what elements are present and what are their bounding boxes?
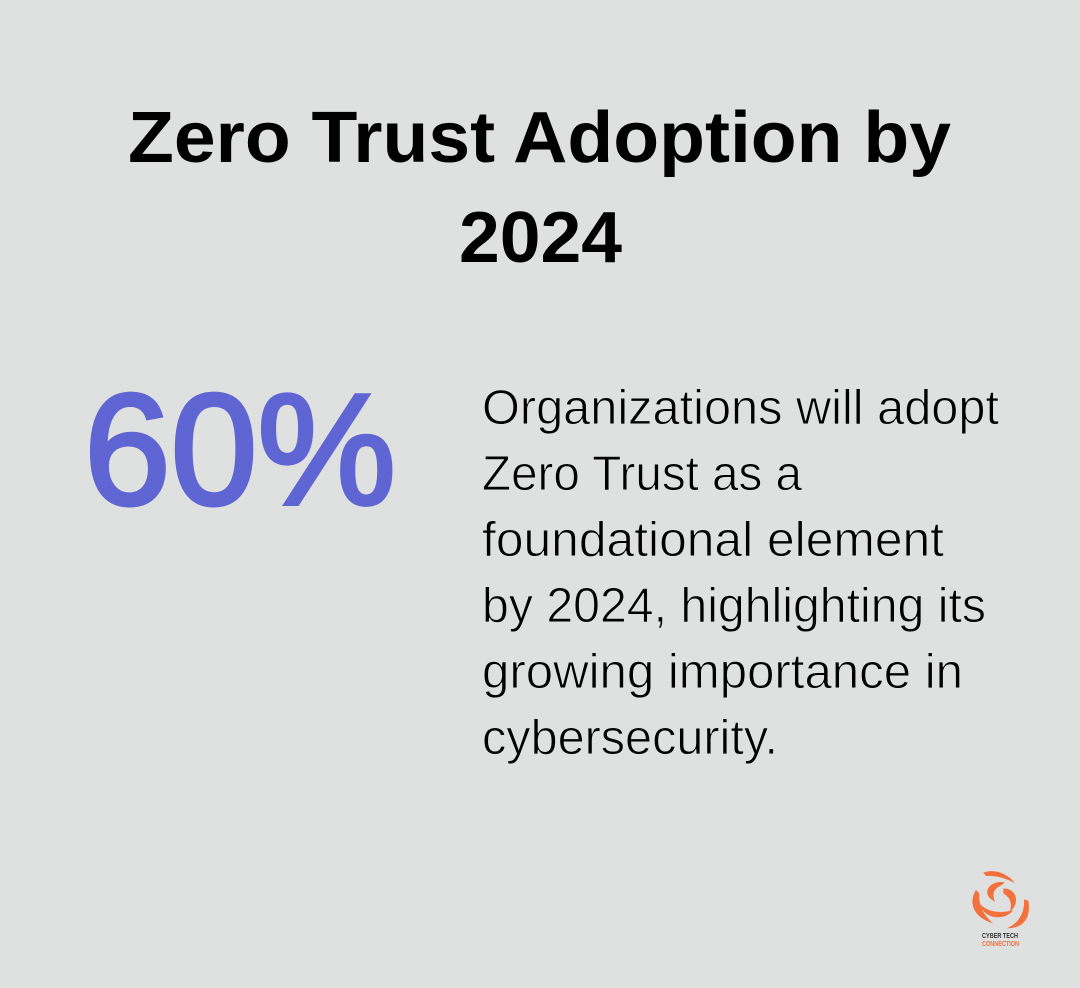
logo: Cyber Tech Connection: CONNECTION [982,941,1019,948]
description text: foundational element [482,513,944,567]
title: 2024 [459,198,622,278]
title [128,98,951,278]
logo wordmark: CYBER TECH [982,933,1018,940]
icon: triskelion swirl [972,871,1029,928]
big statistic: 60%: 60% [84,362,396,538]
title: Zero Trust Adoption by [128,98,951,178]
description text: Zero Trust as a [482,447,803,501]
description text: growing importance in [482,645,963,699]
logo: Cyber Tech Connection [972,871,1029,948]
description text [482,381,999,765]
description text: by 2024, highlighting its [482,579,986,633]
description text: Organizations will adopt [482,381,999,435]
description text: cybersecurity. [482,711,778,765]
